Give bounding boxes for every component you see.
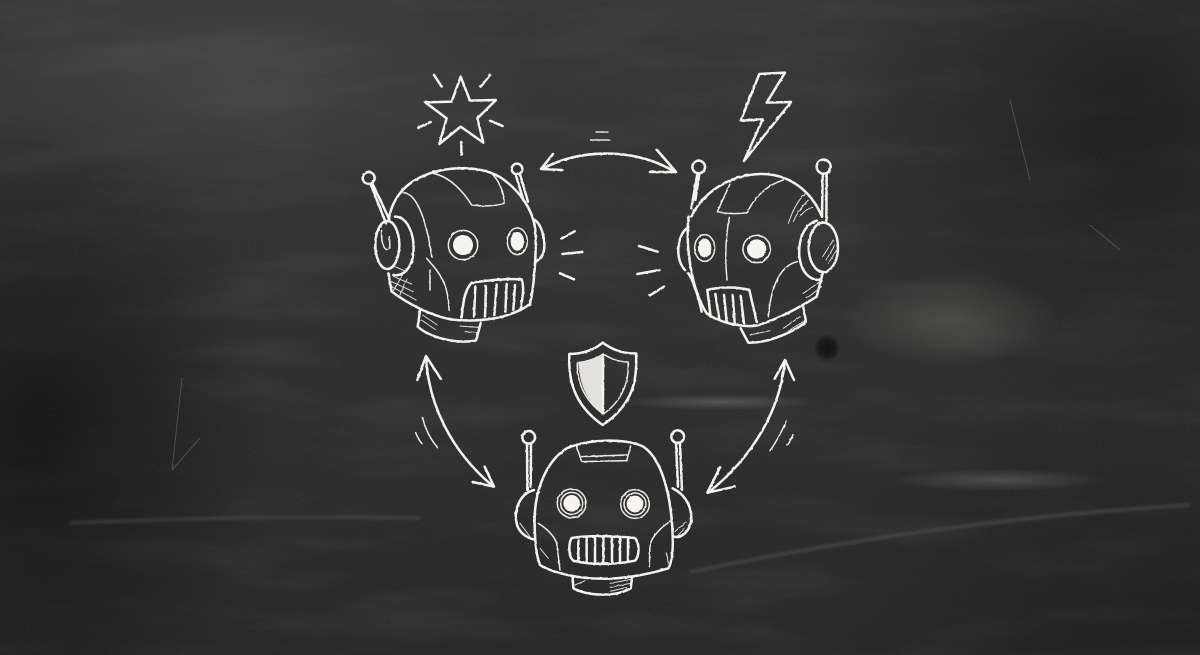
robot head: left — [363, 164, 544, 342]
arrow: left robot to right robot — [541, 132, 676, 172]
eyes — [695, 235, 770, 263]
bottom robot with shield — [416, 343, 794, 595]
robot head: bottom — [516, 430, 691, 595]
icon: shield — [569, 343, 636, 425]
icon: lightning bolt — [741, 73, 791, 161]
right robot with lightning — [637, 73, 838, 343]
sound lines: right robot — [637, 246, 664, 295]
left robot with star — [363, 75, 582, 342]
icon: star — [418, 75, 503, 155]
sound lines: left robot — [560, 231, 582, 279]
eyes — [448, 228, 527, 260]
eyes — [557, 489, 649, 518]
robot group drawing — [363, 73, 838, 595]
arrow: right robot to bottom robot — [707, 360, 794, 493]
robot head: right — [678, 160, 838, 343]
arrow: left robot to bottom robot — [416, 356, 494, 487]
